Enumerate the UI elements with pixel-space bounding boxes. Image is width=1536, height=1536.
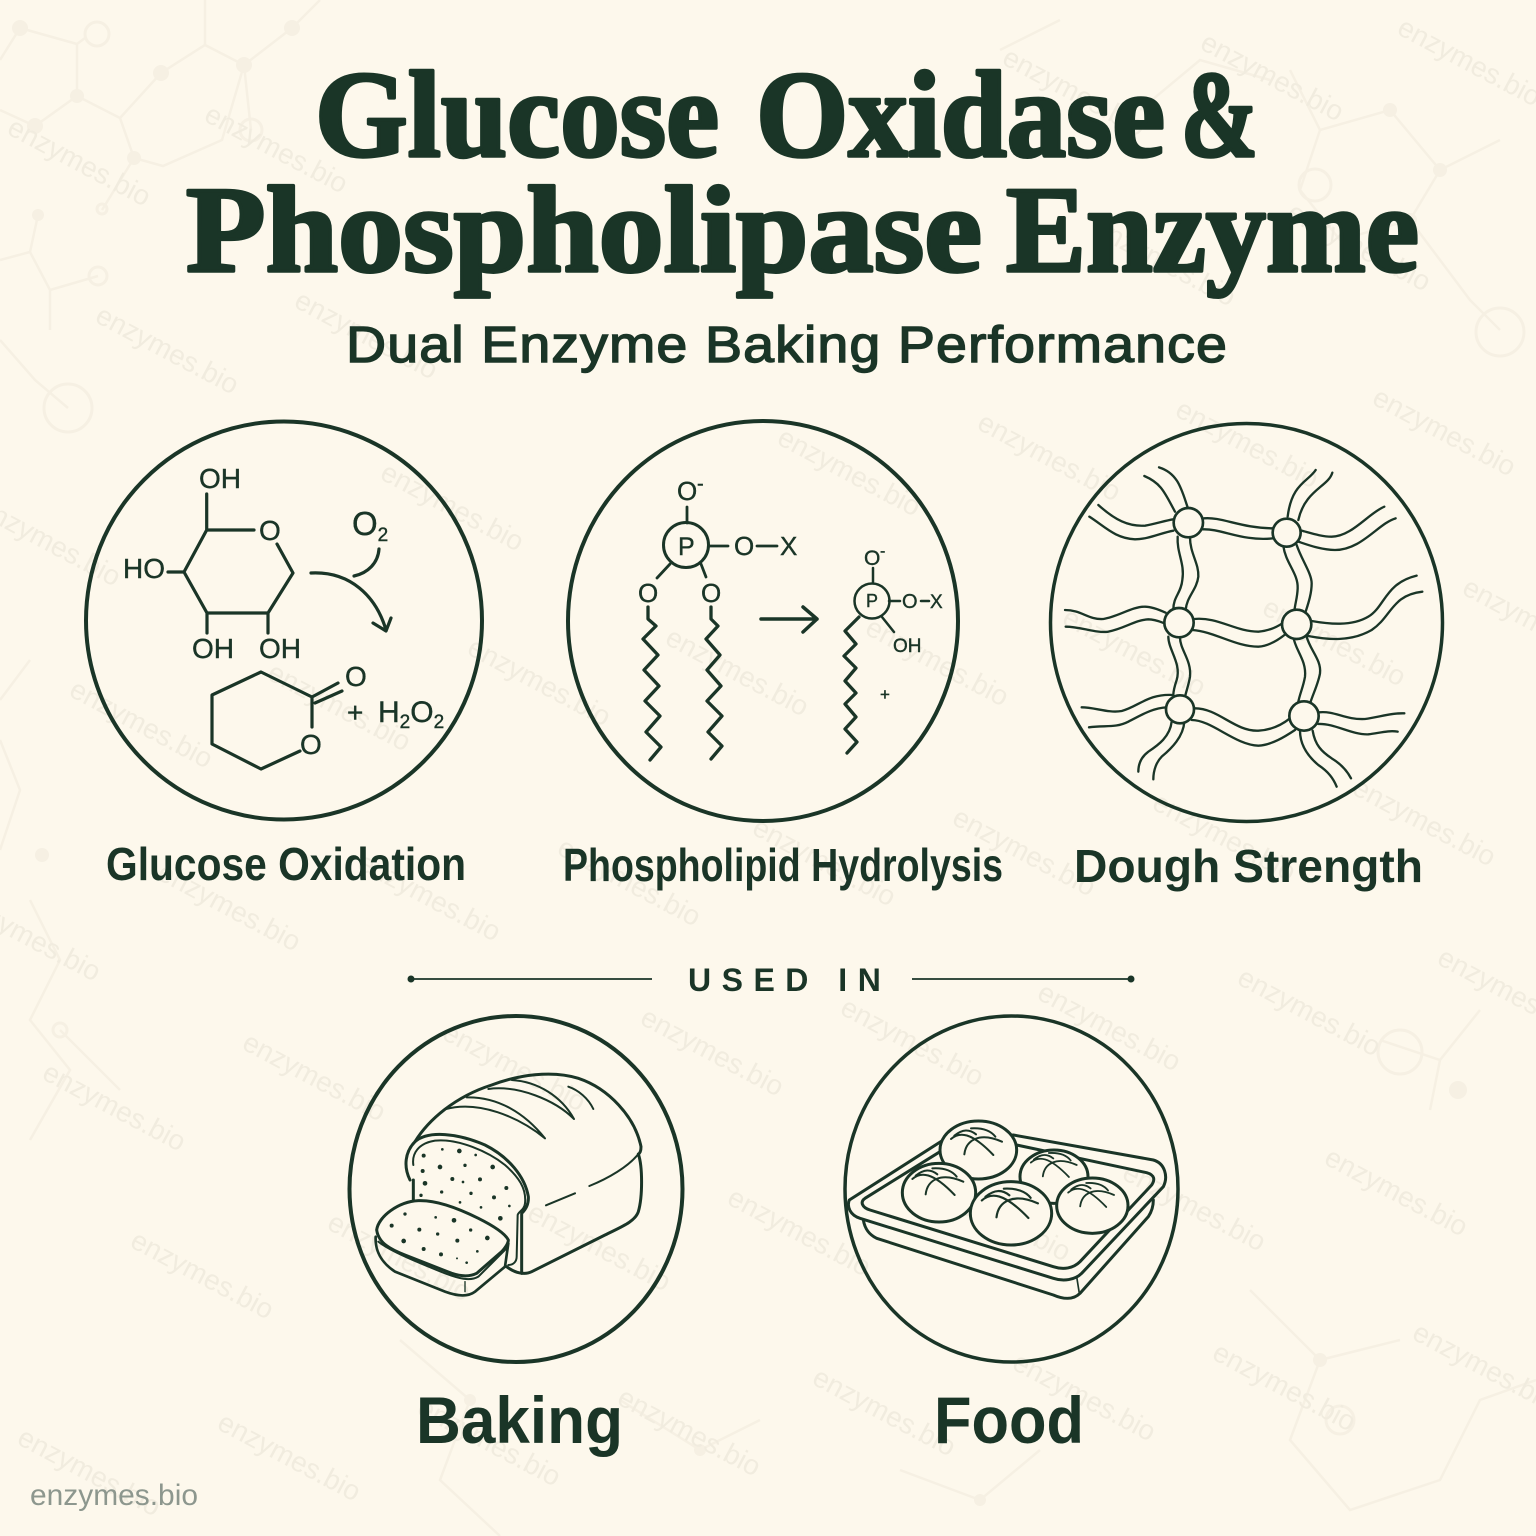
hydrolysis product: O: [902, 591, 918, 613]
text: enzymes.bio: [661, 621, 814, 722]
icon: tray of buns: [848, 1121, 1166, 1298]
panel ring: [845, 1016, 1178, 1362]
label: glucose oxidation: Glucose Oxidation: [106, 838, 466, 890]
text: enzymes.bio: [553, 831, 706, 932]
text: enzymes.bio: [861, 611, 1014, 712]
phospholipid with two tails: O: [638, 578, 658, 608]
lactone product with hydrogen peroxide: O: [345, 661, 367, 692]
used in divider: [408, 962, 1134, 998]
phospholipid with two tails: P: [678, 533, 695, 561]
text: enzymes.bio: [353, 846, 506, 947]
text: enzymes.bio: [1208, 1336, 1361, 1437]
phospholipid with two tails: O: [677, 476, 697, 506]
text: enzymes.bio: [1171, 393, 1324, 494]
label: dough strength: Dough Strength: [1074, 840, 1423, 892]
phospholipid with two tails: -: [697, 473, 704, 495]
title: &: [1181, 46, 1258, 183]
text: enzymes.bio: [808, 1361, 961, 1462]
text: enzymes.bio: [1348, 771, 1501, 872]
text: enzymes.bio: [748, 811, 901, 912]
lactone product with hydrogen peroxide: [212, 661, 444, 769]
text: enzymes.bio: [923, 1166, 1076, 1267]
text: enzymes.bio: [438, 1016, 591, 1117]
oxygen input and reaction arrow: 2: [378, 525, 388, 546]
text: enzymes.bio: [636, 1001, 789, 1102]
text: enzymes.bio: [1008, 1346, 1161, 1447]
panel: dough strength: [1050, 424, 1442, 822]
title: Enzyme: [1006, 161, 1419, 298]
hydrolysis product: P: [866, 591, 878, 611]
lactone product with hydrogen peroxide: H: [378, 696, 400, 729]
text: enzymes.bio: [773, 421, 926, 522]
phospholipid with two tails: O: [734, 531, 754, 561]
label: phospholipid hydrolysis: Phospholipid Hydrolysis: [563, 839, 1003, 891]
text: enzymes.bio: [3, 111, 156, 212]
subtitle: Dual Enzyme Baking Performance: [346, 316, 1228, 373]
icon: bread loaf with slice: [376, 1074, 642, 1295]
text: enzymes.bio: [723, 1181, 876, 1282]
hydrolysis product: OH: [893, 636, 922, 657]
panel ring: [350, 1016, 682, 1362]
reaction arrow: [761, 607, 817, 632]
lactone product with hydrogen peroxide: 2: [400, 712, 410, 733]
text: enzymes.bio: [1088, 211, 1241, 312]
phospholipid with two tails: X: [780, 531, 797, 561]
text: enzymes.bio: [213, 1406, 366, 1507]
text: enzymes.bio: [323, 1206, 476, 1307]
text: enzymes.bio: [238, 1026, 391, 1127]
text: enzymes.bio: [1283, 196, 1436, 297]
text: enzymes.bio: [463, 631, 616, 732]
panel ring: [568, 421, 958, 821]
lactone product with hydrogen peroxide: O: [410, 696, 434, 729]
text: enzymes.bio: [1320, 1141, 1473, 1242]
glucose ring structure: O: [259, 515, 281, 546]
label: food: Food: [934, 1383, 1084, 1457]
text: enzymes.bio: [91, 299, 244, 400]
text: enzymes.bio: [413, 1391, 566, 1492]
hydrolysis product: O: [864, 547, 880, 570]
text: enzymes.bio: [1148, 786, 1301, 887]
panel: baking: [350, 1016, 682, 1362]
glucose ring structure: [123, 463, 301, 664]
text: enzymes.bio: [1233, 961, 1386, 1062]
glucose ring structure: OH: [259, 633, 301, 664]
lactone product with hydrogen peroxide: +: [347, 697, 363, 728]
panel ring: [1050, 424, 1442, 822]
glucose ring structure: OH: [199, 463, 241, 494]
phospholipid with two tails: [638, 473, 797, 760]
panel: food: [845, 1016, 1178, 1362]
text: enzymes.bio: [998, 41, 1151, 142]
title: Phospholipase: [186, 161, 982, 298]
oxygen input and reaction arrow: O: [352, 505, 378, 542]
oxygen input and reaction arrow: [311, 505, 391, 631]
text: enzymes.bio: [948, 801, 1101, 902]
text: enzymes.bio: [38, 1056, 191, 1157]
lactone product with hydrogen peroxide: 2: [434, 712, 444, 733]
lactone product with hydrogen peroxide: O: [300, 729, 322, 760]
glucose ring structure: OH: [192, 633, 234, 664]
text: enzymes.bio: [523, 1196, 676, 1297]
panel: glucose oxidation: [86, 422, 482, 820]
text: enzymes.bio: [376, 456, 529, 557]
hydrolysis product: +: [880, 685, 890, 704]
text: enzymes.bio: [1196, 26, 1349, 127]
text: enzymes.bio: [263, 656, 416, 757]
text: enzymes.bio: [1058, 601, 1211, 702]
used in divider: USED IN: [688, 962, 891, 998]
title: Glucose: [315, 46, 719, 183]
text: enzymes.bio: [613, 1381, 766, 1482]
text: enzymes.bio: [153, 856, 306, 957]
text: enzymes.bio: [126, 1224, 279, 1325]
text: enzymes.bio: [290, 284, 443, 385]
text: enzymes.bio: [1258, 591, 1411, 692]
text: enzymes.bio: [65, 673, 218, 774]
text: enzymes.bio: [1368, 381, 1521, 482]
text: enzymes.bio: [836, 991, 989, 1092]
gluten network: [1065, 467, 1422, 787]
panel ring: [86, 422, 482, 820]
panel: phospholipid hydrolysis: [568, 421, 958, 821]
text: enzymes.bio: [1033, 976, 1186, 1077]
text: enzymes.bio: [13, 1421, 166, 1522]
brand footer: enzymes.bio: [30, 1479, 198, 1512]
text: enzymes.bio: [200, 98, 353, 199]
hydrolysis product: X: [930, 592, 943, 613]
text: enzymes.bio: [1118, 1156, 1271, 1257]
hydrolysis product: [844, 543, 943, 753]
title: [186, 46, 1419, 298]
text: enzymes.bio: [973, 406, 1126, 507]
label: baking: Baking: [416, 1383, 623, 1457]
title: Oxidase: [756, 46, 1165, 183]
phospholipid with two tails: O: [701, 578, 721, 608]
glucose ring structure: HO: [123, 553, 165, 584]
hydrolysis product: -: [880, 543, 885, 560]
